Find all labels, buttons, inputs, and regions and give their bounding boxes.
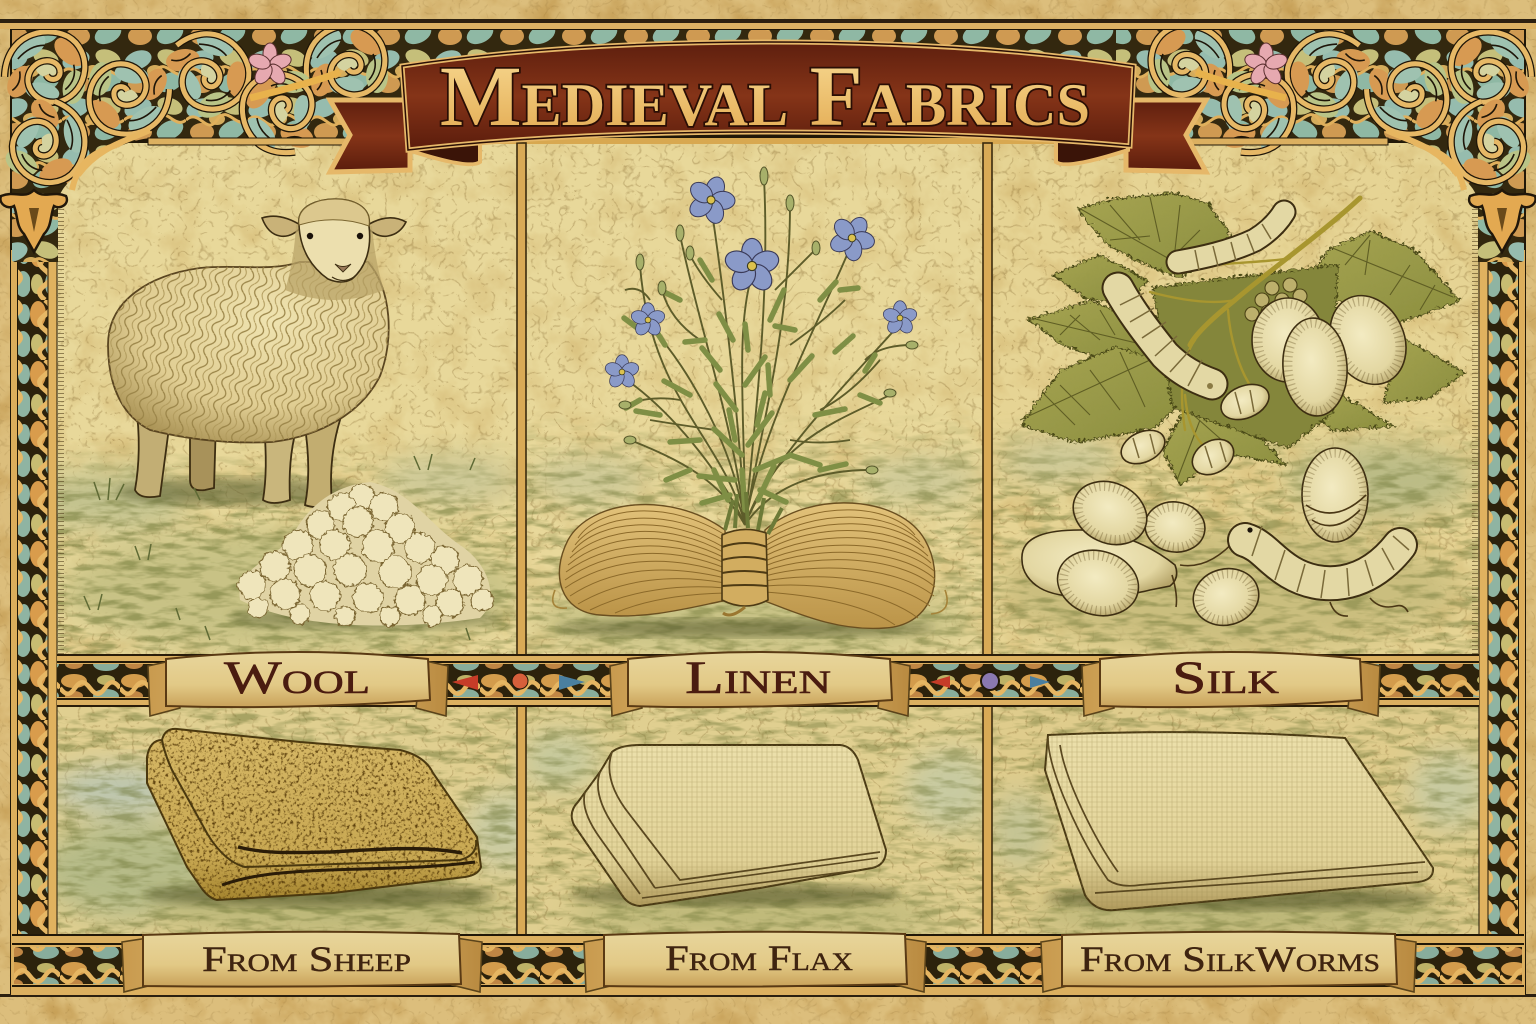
panel: silk cloth scene [990, 704, 1490, 940]
bottom ornamental strip [12, 934, 1524, 995]
panel: linen fibre scene [525, 143, 987, 658]
icon: grass tufts [84, 454, 475, 640]
caption: From Flax: From Flax [665, 938, 853, 978]
icon: sheep [108, 199, 406, 507]
right side vine [1488, 250, 1518, 940]
panel: silk fibre scene [991, 143, 1483, 658]
label: Linen: Linen [685, 652, 831, 704]
icon: folded linen cloth [570, 745, 900, 906]
icon: cocoons on ground [1022, 470, 1265, 633]
icon: flax plant [604, 167, 918, 525]
icon: open cocoon [1302, 448, 1368, 542]
icon: branch [1150, 198, 1360, 450]
panel dividers [517, 143, 992, 943]
icon: flax flowers [604, 169, 918, 390]
panel: wool cloth scene [40, 704, 545, 940]
label: Linen [610, 652, 910, 716]
caption: From SilkWorms [1041, 932, 1416, 992]
top ornamental band [340, 30, 1196, 144]
caption: From Sheep: From Sheep [202, 939, 411, 979]
panel: wool fibre scene [30, 143, 520, 658]
caption: From Sheep [122, 932, 482, 992]
panel: linen cloth scene [520, 704, 995, 940]
icon: large silkworm [1245, 526, 1409, 616]
top right corner ornament [1116, 15, 1536, 262]
label: Wool [148, 652, 448, 716]
title: Medieval Fabrics [440, 48, 1090, 144]
left side vine [18, 250, 48, 940]
top left corner ornament [0, 15, 420, 262]
label: Silk [1082, 652, 1380, 716]
icon: folded wool cloth [145, 729, 495, 907]
icon: cocoons on leaf [1252, 283, 1420, 418]
icon: strip arrow and flower [452, 675, 478, 690]
caption: From SilkWorms: From SilkWorms [1080, 939, 1380, 979]
middle ornamental strip [57, 654, 1479, 707]
title banner [330, 42, 1206, 172]
label: Wool: Wool [224, 652, 370, 704]
icon: raw fleece pile [230, 482, 500, 629]
icon: folded silk cloth [1045, 732, 1435, 910]
label: Silk: Silk [1172, 652, 1279, 704]
caption: From Flax [584, 932, 926, 992]
icon: berry cluster [1245, 278, 1307, 321]
icon: flax fibre bundle [553, 503, 947, 637]
icon: mulberry leaves [1018, 190, 1462, 482]
icon: silkworms on leaves [1116, 212, 1284, 482]
